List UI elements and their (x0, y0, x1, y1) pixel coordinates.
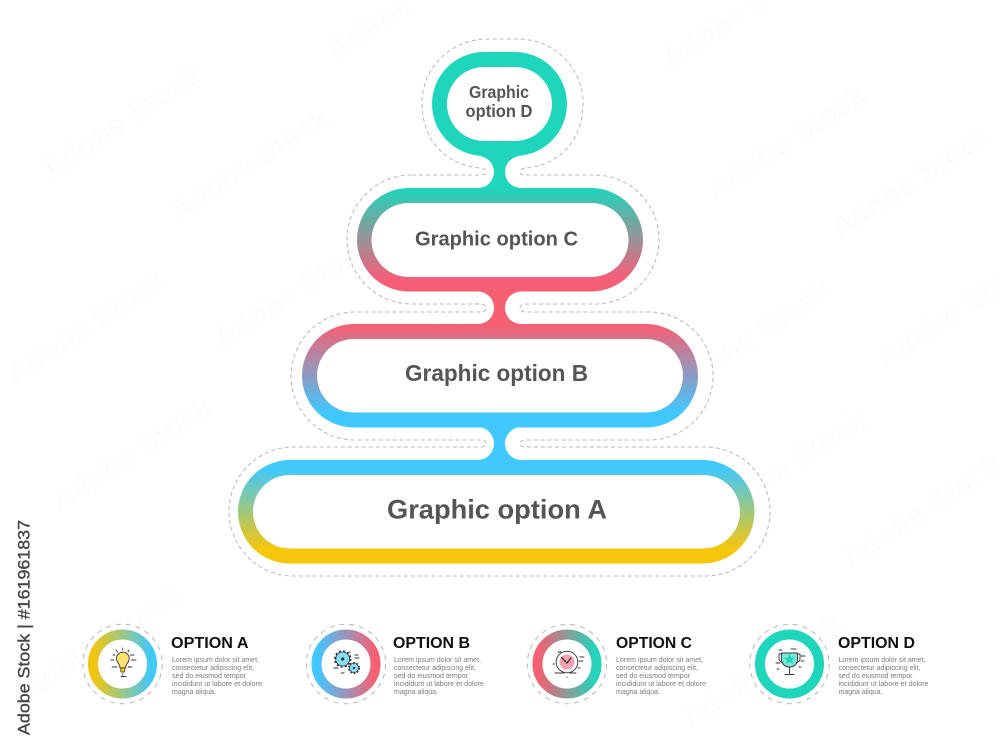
option C body text: Lorem ipsum dolor sit amet, (616, 655, 703, 664)
option A gradient ring (93, 634, 152, 694)
option B body text: Lorem ipsum dolor sit amet, (394, 655, 481, 664)
tier B ring (302, 324, 698, 428)
stock watermark: Adobe Stock (164, 100, 336, 228)
tier D: Graphic option D (432, 52, 567, 188)
icon: trophy (776, 649, 805, 674)
tier A inner (253, 475, 740, 548)
stock watermark: Adobe Stock (1, 263, 173, 391)
option A body text: magna aliqua. (172, 687, 216, 696)
legend item: option D (750, 624, 928, 704)
tier A label: Graphic option A (387, 494, 607, 524)
tier C label: Graphic option C (415, 228, 578, 250)
option B body text: sed do eiusmod tempor (394, 671, 468, 680)
option C body text: magna aliqua. (616, 687, 660, 696)
stock watermark: Adobe Stock (666, 273, 838, 401)
stock watermark: Adobe Stock (826, 118, 998, 246)
option C gradient ring (538, 634, 596, 694)
tier D ring (432, 52, 567, 156)
tier A ring (238, 460, 754, 564)
option D body text (838, 655, 928, 696)
tier C ring (357, 188, 643, 292)
stock watermark: Adobe Stock (701, 78, 873, 206)
option B body text: magna aliqua. (394, 687, 438, 696)
option B dashed circle (306, 624, 386, 704)
legend item: option A (83, 624, 262, 704)
legend item: option C (527, 624, 706, 704)
option A dashed circle (83, 624, 162, 704)
tier C connector (478, 292, 521, 324)
option C body text: sed do eiusmod tempor (616, 671, 690, 680)
tier D label (466, 82, 532, 121)
option A body text: Lorem ipsum dolor sit amet, (172, 655, 259, 664)
tier B inner (317, 339, 683, 412)
tier D connector (478, 156, 521, 188)
tier C: Graphic option C (357, 188, 643, 324)
tier B connector (478, 427, 521, 460)
option D body text: consectetur adipiscing elit, (838, 663, 920, 672)
option C body text: consectetur adipiscing elit, (616, 663, 698, 672)
option D title: OPTION D (838, 635, 915, 652)
option D body text: magna aliqua. (838, 687, 882, 696)
option B body text: consectetur adipiscing elit, (394, 663, 476, 672)
option A body text (172, 655, 262, 696)
stock watermark: Adobe Stock (16, 578, 188, 706)
option C body text (616, 655, 706, 696)
icon: gears (334, 651, 359, 673)
stock watermark: Adobe Stock (46, 390, 218, 518)
stock credit vertical text: Adobe Stock | #161961837 (14, 520, 34, 735)
tier B label: Graphic option B (405, 360, 588, 386)
tier B: Graphic option B (302, 324, 698, 460)
option A title: OPTION A (171, 635, 249, 652)
tier C inner (372, 203, 628, 277)
legend item: option B (306, 624, 484, 704)
stock watermark: Adobe Stock (701, 403, 873, 531)
option B body text (394, 655, 484, 696)
option A body text: consectetur adipiscing elit, (172, 663, 254, 672)
tier D label: Graphic (469, 82, 529, 102)
option D ring (760, 634, 819, 694)
tier A: Graphic option A (238, 460, 754, 564)
stock watermark: Adobe Stock (208, 228, 380, 356)
tier D label: option D (466, 101, 532, 121)
option D body text: incididunt ut labore et dolore (838, 679, 928, 688)
option A body text: sed do eiusmod tempor (172, 671, 246, 680)
option B body text: incididunt ut labore et dolore (394, 679, 484, 688)
option C dashed circle (527, 624, 607, 704)
option C title: OPTION C (616, 635, 692, 652)
stock watermark: Adobe Stock (676, 608, 848, 736)
option C body text: incididunt ut labore et dolore (616, 679, 706, 688)
option B gradient ring (316, 634, 376, 694)
option D body text: Lorem ipsum dolor sit amet, (838, 655, 926, 664)
dashed outline around pyramid (229, 39, 770, 576)
option B title: OPTION B (393, 635, 470, 652)
option D body text: sed do eiusmod tempor (838, 671, 913, 680)
tier D inner (447, 67, 552, 141)
stock watermark: Adobe Stock (336, 273, 508, 401)
option A body text: incididunt ut labore et dolore (172, 679, 262, 688)
icon: clock (553, 651, 584, 678)
option D dashed circle (750, 624, 829, 704)
icon: light bulb (111, 648, 136, 676)
stock watermark: Adobe Stock (36, 58, 208, 186)
